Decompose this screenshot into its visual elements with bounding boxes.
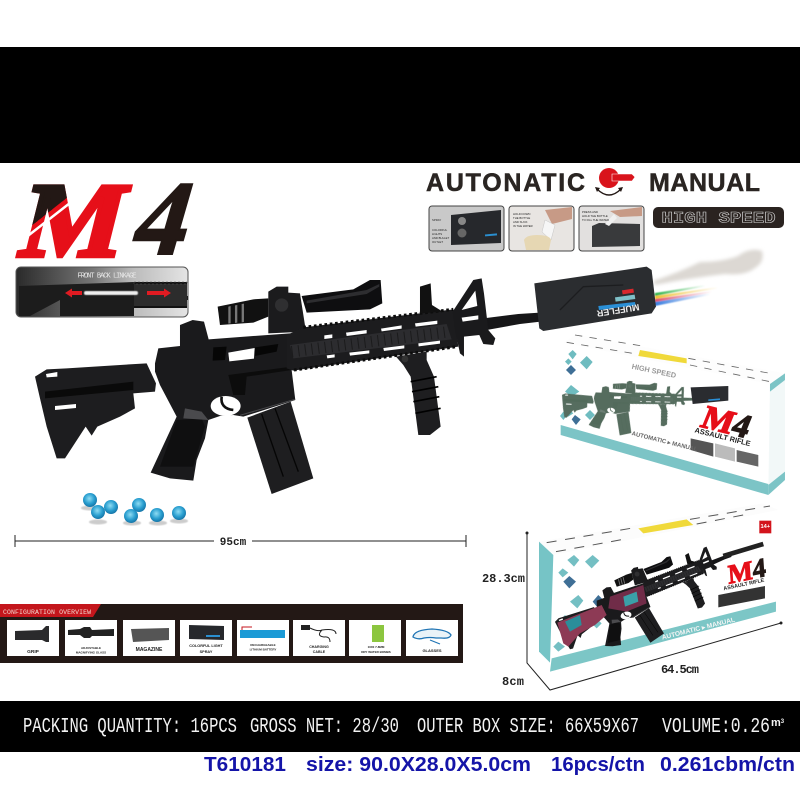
bottom black packing bar: 3 [781, 719, 785, 725]
yellow handle [638, 519, 693, 533]
yellow handle [638, 350, 687, 363]
box muffler [691, 386, 728, 404]
photo: spray head: COLORFUL [432, 228, 448, 232]
gel water beads [81, 493, 188, 526]
M4 logo: M [10, 162, 139, 280]
card: adjustable magnifying glass: MAGNIFYING GLASS [76, 650, 106, 654]
tiny gun pattern [567, 335, 770, 382]
smoke plume [653, 250, 763, 285]
photo: fill bottle in water [509, 206, 574, 251]
heading: automatic manual: AUTONATIC [426, 169, 585, 197]
heading: automatic manual [426, 168, 760, 197]
panel: configuration overview: CONFIGURATION OVERVIEW [3, 609, 91, 616]
box barrel extension [723, 544, 763, 556]
photo: fill bottle in water: AND SUCK [513, 220, 528, 224]
box assault rifle caption: ASSAULT RIFLE [694, 426, 752, 448]
bottom black packing bar [0, 701, 800, 752]
bottom black packing bar: OUTER BOX SIZE: 66X59X67 [417, 716, 639, 739]
product box: lower (graffiti) [539, 503, 778, 672]
card: charging cable: CHARGING [309, 645, 329, 649]
item number and size line [204, 754, 795, 776]
card: charging cable [293, 620, 345, 656]
photo: fill the muffler [579, 206, 644, 251]
box linkage photo [718, 586, 765, 607]
label: 8cm: 8cm [502, 675, 524, 689]
photo: fill bottle in water: THE BOTTLE [513, 216, 530, 220]
age badge [759, 521, 771, 533]
panel: configuration overview [0, 604, 463, 663]
rifle [35, 267, 656, 494]
label: 28.3cm: 28.3cm [482, 572, 525, 586]
muffler [534, 267, 656, 331]
red heading tab [0, 604, 101, 617]
card: colorful light spray: SPRAY [200, 650, 213, 654]
M4 logo: 4 [121, 161, 208, 278]
item number and size line: size: 90.0X28.0X5.0cm [306, 754, 531, 776]
box rifle [557, 369, 699, 446]
card: rechargeable lithium battery: RECHARGEABLE [250, 643, 276, 647]
coloured light streaks [655, 285, 718, 306]
teal and blue diamonds [560, 350, 595, 420]
card: grip: GRIP [27, 649, 40, 655]
card: colorful light spray [180, 620, 232, 656]
photo: spray head: OUTLET [432, 240, 443, 244]
badge: high speed [653, 207, 784, 228]
feature photos [429, 206, 644, 251]
box mini photos [691, 438, 713, 457]
red arrows [65, 288, 171, 298]
bottom black packing bar: m [771, 717, 781, 729]
photo: fill the muffler: TO FILL THE WATER [582, 218, 609, 222]
box M4 logo: M4 [727, 552, 767, 590]
box assault rifle caption: ASSAULT RIFLE [723, 578, 765, 592]
heading: automatic manual: MANUAL [649, 169, 760, 197]
M4 logo: M [10, 162, 139, 280]
card: glasses [406, 620, 458, 656]
muffler label: MUFFLER [596, 302, 640, 319]
card: dry water bombs: DRY WATER BOMBS [361, 650, 391, 654]
photo: fill the muffler: PRESS AND [582, 210, 598, 214]
dimension: 95cm length: 95cm [220, 537, 247, 549]
dimension: 95cm length [15, 535, 466, 549]
box heading high speed: HIGH SPEED [631, 362, 677, 380]
card: adjustable magnifying glass [65, 620, 117, 656]
card: adjustable magnifying glass: ADJUSTABLE [81, 646, 101, 650]
bottom black packing bar: VOLUME:0.26 [662, 716, 770, 739]
card: charging cable: CABLE [313, 650, 326, 654]
panel: front back linkage [16, 267, 188, 317]
box M4 logo: M4 [696, 399, 757, 446]
photo: spray head: LIGHTS [432, 232, 442, 236]
photo: spray head [429, 206, 504, 251]
teal and blue diamonds [553, 555, 602, 652]
tiny gun pattern [547, 506, 770, 552]
card: rechargeable lithium battery [237, 620, 289, 656]
item number and size line: 0.261cbm/ctn [660, 754, 795, 776]
box mode text: AUTOMATIC ▸ MANUAL [631, 431, 698, 453]
card: magazine: MAGAZINE [136, 647, 163, 653]
box mode text: AUTOMATIC ▸ MANUAL [661, 617, 736, 642]
box dimension lines [526, 532, 782, 690]
item number and size line: 16pcs/ctn [551, 754, 645, 776]
photo: fill bottle in water: IN THE WATER [513, 224, 533, 228]
top black banner [0, 47, 800, 163]
graffiti stock [557, 605, 607, 647]
photo: fill bottle in water: HOLD DOWN [513, 212, 530, 216]
age badge: 14+ [760, 524, 771, 530]
card: grip [7, 620, 59, 656]
badge: high speed: HIGH SPEED [662, 210, 776, 228]
photo: fill the muffler: HOLD THE BOTTLE [582, 214, 608, 218]
card: rechargeable lithium battery: LITHIUM BATTERY [250, 648, 276, 652]
label: 64.5cm: 64.5cm [661, 663, 699, 677]
box rifle [546, 541, 747, 664]
item number and size line: T610181 [204, 754, 286, 776]
M4 logo [15, 183, 194, 258]
linkage caption: FRONT BACK LINKAGE [78, 272, 136, 280]
product box: upper (high speed) [557, 334, 785, 495]
photo: spray head: SPRAY [432, 218, 441, 222]
photo: spray head: AND BULLET [432, 236, 450, 240]
card: magazine [123, 620, 175, 656]
card: glasses: GLASSES [422, 648, 442, 653]
card: colorful light spray: COLORFUL LIGHT [189, 644, 223, 648]
icon: selector switch [595, 168, 635, 195]
card: dry water bombs: 1000 7-8MM [368, 645, 385, 649]
bottom black packing bar: GROSS NET: 28/30 [250, 716, 399, 739]
card: dry water bombs [349, 620, 401, 656]
bottom black packing bar: PACKING QUANTITY: 16PCS [23, 716, 237, 739]
